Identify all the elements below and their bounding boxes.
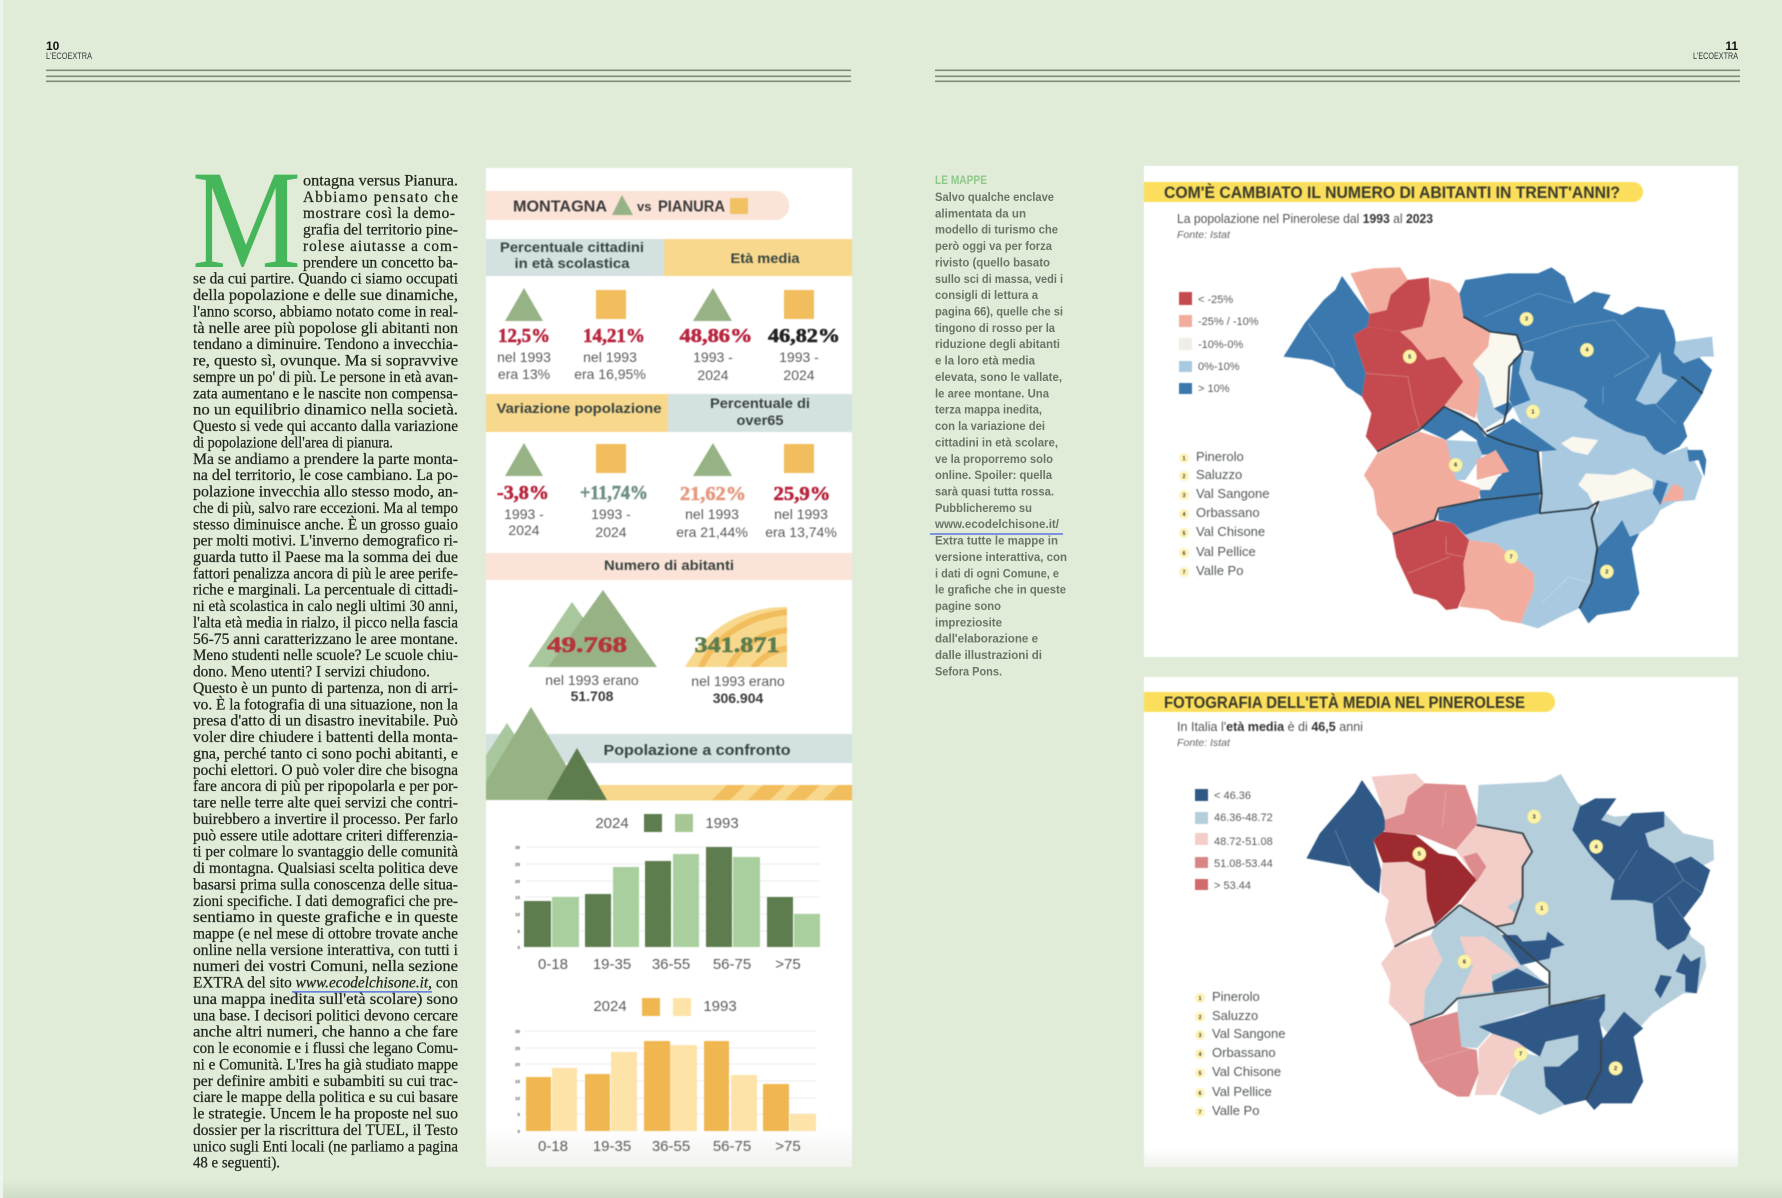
sidebar: le mappe: terza mappa inedita, xyxy=(935,403,1042,417)
legend: places: 3 xyxy=(1183,493,1186,499)
article body text: Meno studenti nelle scuole? Le scuole chiu- xyxy=(193,647,458,664)
page header right xyxy=(935,39,1740,82)
article body text: ti per colmare lo svantaggio delle comunità xyxy=(193,844,458,861)
article body text: presa d'atto di un disastro inevitabile. Può xyxy=(193,713,458,730)
mountain count: 51.708 xyxy=(571,688,614,704)
sidebar: le mappe xyxy=(930,173,1067,678)
mountain count: nel 1993 erano xyxy=(545,672,639,688)
article body text: le strategie. Uncem le ha proposte nel suo xyxy=(193,1106,458,1123)
legend: places: 5 xyxy=(1183,531,1186,537)
bar chart: montagna: 5 xyxy=(517,929,520,934)
sidebar: le mappe: versione interattiva, con xyxy=(935,550,1067,564)
stats row 2 xyxy=(497,443,837,540)
legend: population classes xyxy=(1179,292,1259,395)
bar chart: montagna: 0 xyxy=(517,945,520,950)
legend: pianura chart: 2024 xyxy=(593,998,627,1015)
article body text: di popolazione dell'area di pianura. xyxy=(193,434,393,451)
bar chart: pianura xyxy=(515,1029,816,1155)
page header left: 10 xyxy=(46,39,60,53)
article body text: numeri dei vostri Comuni, nella sezione xyxy=(193,958,458,975)
choropleth map: median age: 1 xyxy=(1540,906,1543,912)
legend: places: 6 xyxy=(1183,551,1186,557)
article body text: na del territorio, le cose cambiano. La po- xyxy=(193,467,458,484)
sidebar: le mappe: con la variazione dei xyxy=(935,419,1045,433)
bar chart: montagna: 10 xyxy=(515,912,520,917)
stats row 2: era 13,74% xyxy=(765,524,837,540)
sidebar: le mappe: Extra tutte le mappe in xyxy=(935,534,1058,548)
legend: places: 6 xyxy=(1199,1091,1202,1097)
article body text: Questo si vede qui accanto dalla variazione xyxy=(193,418,458,435)
mountains illustration xyxy=(485,706,608,801)
bar chart: montagna: 0-18 xyxy=(538,956,568,973)
legend: pianura chart xyxy=(593,998,737,1016)
section headers row 1: Età media xyxy=(730,250,800,266)
section headers row 2 xyxy=(486,394,852,432)
stats row 2: +11,74% xyxy=(580,482,648,504)
sidebar: le mappe: www.ecodelchisone.it/ xyxy=(934,517,1060,531)
article body text: zata aumentano e le nascite non compensa- xyxy=(193,385,458,402)
sidebar: le mappe: le aree montane. Una xyxy=(935,386,1049,400)
title pill: vs xyxy=(637,199,651,214)
choropleth map: median age xyxy=(1306,773,1714,1115)
article body text: Questo è un punto di partenza, non di arri- xyxy=(193,680,458,697)
sidebar: le mappe: riduzione degli abitanti xyxy=(935,337,1060,351)
legend: places: 4 xyxy=(1199,1052,1202,1058)
choropleth map: median age: 3 xyxy=(1533,815,1536,820)
page header left: L'ECOEXTRA xyxy=(46,51,93,62)
field count: 306.904 xyxy=(713,690,764,706)
stats row 2: 1993 - xyxy=(504,506,544,522)
stats row 2: 1993 - xyxy=(591,506,631,522)
article body text: EXTRA del sito www.ecodelchisone.it, con xyxy=(193,975,458,992)
sidebar: le mappe: pagine sono xyxy=(935,599,1001,613)
bar chart: montagna: 36-55 xyxy=(652,956,690,973)
sidebar: le mappe: dall'elaborazione e xyxy=(935,632,1038,646)
legend: age classes: 48.72-51.08 xyxy=(1214,836,1273,848)
band: numero di abitanti xyxy=(486,553,852,580)
legend: places: Val Pellice xyxy=(1212,1084,1272,1099)
sidebar: le mappe: e la loro età media xyxy=(935,354,1035,368)
article body text: voler dire chiudere i battenti della monta- xyxy=(193,729,458,746)
sidebar: le mappe: Sefora Pons. xyxy=(935,664,1002,678)
article body text: vo. È la fotografia di una situazione, non la xyxy=(193,696,458,713)
article body text: di montagna. Qualsiasi scelta politica deve xyxy=(193,860,458,877)
legend: population classes: -25% / -10% xyxy=(1198,316,1259,328)
choropleth map: population change: 2 xyxy=(1605,570,1608,575)
bar chart: montagna xyxy=(515,845,820,973)
sidebar: le mappe: LE MAPPE xyxy=(935,173,987,187)
stats row 2: 25,9% xyxy=(774,483,830,505)
article body text: sentiamo in queste grafiche e in queste xyxy=(193,909,458,926)
legend: places: Orbassano xyxy=(1212,1045,1276,1060)
legend: population classes: 0%-10% xyxy=(1198,361,1240,373)
article body text: Ma se andiamo a prendere la parte monta- xyxy=(193,451,458,468)
bar chart: pianura: 36-55 xyxy=(652,1138,690,1155)
panel: infographic montagna vs pianura xyxy=(457,168,852,1167)
choropleth map: median age: 6 xyxy=(1463,960,1466,965)
legend: age classes: 51.08-53.44 xyxy=(1214,858,1273,870)
stats row 2: nel 1993 xyxy=(685,506,739,522)
field count: 341.871 xyxy=(694,632,780,657)
article body text: polazione invecchia allo stesso modo, an- xyxy=(193,484,458,500)
article body text: dono. Meno utenti? I servizi chiudono. xyxy=(193,664,430,681)
sidebar: le mappe: Pubblicheremo su xyxy=(935,501,1032,515)
article body text: ciare le mappe della politica e su cui basare xyxy=(193,1089,458,1106)
page header right: 11 xyxy=(1725,39,1738,53)
sidebar: le mappe: Salvo qualche enclave xyxy=(935,190,1054,204)
choropleth map: median age: 7 xyxy=(1519,1052,1522,1058)
choropleth map: median age: 4 xyxy=(1595,845,1598,850)
article body text: guarda tutto il Paese ma la somma dei due xyxy=(193,549,458,566)
choropleth map: population change: 7 xyxy=(1510,555,1513,560)
sidebar: le mappe: sullo sci di massa, vedi i xyxy=(935,272,1063,286)
sidebar: le mappe: impreziosite xyxy=(935,615,1002,629)
choropleth map: population change: 5 xyxy=(1408,355,1411,360)
article body text xyxy=(192,142,458,1172)
article body text: mappe (e nel mese di ottobre trovate anche xyxy=(193,926,458,942)
stats row 1: 12,5% xyxy=(498,325,550,347)
bar chart: montagna: 30 xyxy=(515,845,520,850)
article body text: pochi elettori. O può voler dire che bisogna xyxy=(193,762,458,779)
bar chart: pianura: 0-18 xyxy=(538,1138,568,1155)
legend: places: Val Pellice xyxy=(1196,544,1256,559)
article body text: che di più, salvo rare eccezioni. Ma al tempo xyxy=(193,500,458,517)
sidebar: le mappe: pagina 66), quelle che si xyxy=(935,304,1063,318)
article body text: per definire ambiti e subambiti su cui trac- xyxy=(193,1073,458,1090)
stats row 1: 1993 - xyxy=(693,349,733,365)
sidebar: le mappe: ve la proporremo solo xyxy=(935,452,1053,466)
article body text: no un equilibrio dinamico nella società. xyxy=(193,402,458,419)
bar chart: montagna: 20 xyxy=(515,879,520,884)
article body text: fare ancora di più per ripopolarla e per por- xyxy=(193,778,458,795)
drop cap M: M xyxy=(192,142,301,298)
article body text: riche e marginali. La percentuale di cittadi- xyxy=(193,582,458,599)
band: numero di abitanti: Numero di abitanti xyxy=(604,557,734,573)
decorative field stripe xyxy=(590,785,852,800)
band: popolazione a confronto: Popolazione a confronto xyxy=(604,742,790,759)
legend: places: 2 xyxy=(1199,1015,1202,1021)
legend: places: 2 xyxy=(1183,474,1186,480)
sidebar: le mappe: modello di turismo che xyxy=(935,223,1058,237)
choropleth map: population change: 4 xyxy=(1585,348,1589,354)
bar chart: pianura: 5 xyxy=(517,1112,520,1117)
legend: places: Pinerolo xyxy=(1196,449,1244,464)
legend: population classes: < -25% xyxy=(1198,294,1233,306)
article body text: fattori penalizza ancora di più le aree perife- xyxy=(193,565,458,582)
page header right: L'ECOEXTRA xyxy=(1693,51,1739,62)
legend: places: 1 xyxy=(1199,996,1202,1002)
subtitle: age map: In Italia l'età media è di 46,5 anni xyxy=(1177,719,1363,734)
sidebar: le mappe: però oggi va per forza xyxy=(935,239,1052,253)
sidebar: le mappe: online. Spoiler: quella xyxy=(935,468,1052,482)
choropleth map: population change: 1 xyxy=(1531,410,1535,415)
article body text: una base. I decisori politici devono cercare xyxy=(193,1007,458,1024)
article body text: prendere un concetto ba- xyxy=(303,254,458,271)
legend: places: Val Sangone xyxy=(1196,486,1270,501)
legend: pianura chart: 1993 xyxy=(703,998,737,1015)
panel: map population change xyxy=(1144,166,1738,657)
legend: montagna chart: 1993 xyxy=(705,815,739,832)
subtitle: age map xyxy=(1177,719,1363,749)
article body text: se da cui partire. Quando ci siamo occupati xyxy=(193,271,458,288)
article body text: ontagna versus Pianura. xyxy=(303,172,458,190)
article body text: basarsi prima sulla conoscenza delle situa- xyxy=(193,876,458,893)
article body text: unico sugli Enti locali (ne parliamo a pagina xyxy=(193,1138,458,1155)
sidebar: le mappe: dalle illustrazioni di xyxy=(935,648,1042,662)
section headers row 1: in età scolastica xyxy=(514,255,630,271)
bar chart: pianura: 10 xyxy=(515,1096,520,1101)
sidebar: le mappe: sarà quasi tutta rossa. xyxy=(935,484,1054,498)
section headers row 1 xyxy=(486,239,852,276)
stats row 1: 1993 - xyxy=(779,349,819,365)
article body text: l'alta età media in rialzo, il picco nella fascia xyxy=(193,614,458,632)
stats row 1: 14,21% xyxy=(583,325,645,347)
article body text: ni e Comunità. L'Ires ha già studiato mappe xyxy=(193,1056,458,1074)
article body text: online nella versione interattiva, con tutti i xyxy=(193,942,458,959)
stats row 1: nel 1993 xyxy=(497,349,551,365)
legend: places: 3 xyxy=(1199,1033,1202,1039)
sidebar: le mappe: tingono di rosso per la xyxy=(935,321,1055,335)
sidebar: le mappe: elevata, sono le vallate, xyxy=(935,370,1062,384)
subtitle: age map: Fonte: Istat xyxy=(1177,738,1231,749)
section headers row 2: over65 xyxy=(736,412,784,428)
stats row 1: nel 1993 xyxy=(583,349,637,365)
stats row 1: era 16,95% xyxy=(574,366,646,382)
legend: places: 7 xyxy=(1199,1110,1202,1116)
article body text: buirebbero a invertire il processo. Per farlo xyxy=(193,811,458,828)
article body text: può essere utile adottare criteri differenzia- xyxy=(193,827,458,844)
article body text: grafia del territorio pine- xyxy=(303,222,458,239)
subtitle: population map: La popolazione nel Pinerolese dal 1993 al 2023 xyxy=(1177,211,1433,226)
article body text: rolese aiutasse a com- xyxy=(303,238,458,255)
stats row 1: 48,86% xyxy=(680,325,752,347)
bar chart: montagna: 25 xyxy=(515,862,520,867)
article body text: ni età scolastica in calo negli ultimi 30 anni, xyxy=(193,598,458,615)
stats row 2: 21,62% xyxy=(680,483,746,505)
choropleth map: median age: 2 xyxy=(1614,1066,1617,1072)
legend: places: Saluzzo xyxy=(1212,1008,1258,1023)
legend: places: Val Chisone xyxy=(1196,524,1265,539)
legend: places: 4 xyxy=(1183,512,1186,518)
legend: places: Orbassano xyxy=(1196,505,1260,520)
legend: age classes: > 53.44 xyxy=(1214,880,1251,892)
legend: population classes: > 10% xyxy=(1198,383,1230,395)
band: popolazione a confronto xyxy=(486,734,852,763)
legend: montagna chart: 2024 xyxy=(595,815,629,832)
page header left xyxy=(46,39,851,82)
article body text: con le economie e i flussi che legano Comu- xyxy=(193,1040,458,1057)
legend: places: Pinerolo xyxy=(1212,989,1260,1004)
choropleth map: median age: 5 xyxy=(1418,852,1421,858)
stats row 1: 2024 xyxy=(697,367,729,383)
bar chart: pianura: 19-35 xyxy=(593,1138,631,1155)
bar chart: pianura: 15 xyxy=(515,1079,520,1084)
sidebar: le mappe: rivisto (quello basato xyxy=(935,255,1050,269)
mountain count: 49.768 xyxy=(547,632,627,657)
bar chart: montagna: 19-35 xyxy=(593,956,631,973)
article body text: Abbiamo pensato che xyxy=(303,189,458,206)
article body text: zioni specifiche. I dati demografici che pre- xyxy=(193,893,458,910)
legend: places: 5 xyxy=(1199,1071,1202,1077)
legend: places: Saluzzo xyxy=(1196,467,1242,482)
article body text: tà nelle aree più popolose gli abitanti non xyxy=(193,320,458,337)
stats row 2: nel 1993 xyxy=(774,506,828,522)
sidebar: le mappe: cittadini in età scolare, xyxy=(935,435,1058,449)
stats row 1: era 13% xyxy=(498,366,550,382)
legend: places: 7 xyxy=(1183,570,1186,576)
article body text: dossier per la riscrittura del TUEL, il Testo xyxy=(193,1122,458,1139)
choropleth map: population change xyxy=(1283,267,1714,628)
bar chart: montagna: 15 xyxy=(515,895,520,900)
stats row 1 xyxy=(497,288,840,383)
legend: places: Val Chisone xyxy=(1212,1064,1281,1079)
stats row 1: 46,82% xyxy=(768,325,840,347)
article body text: mostrare così la demo- xyxy=(303,205,455,222)
bar chart: pianura: 20 xyxy=(515,1062,520,1067)
sidebar: le mappe: consigli di lettura a xyxy=(935,288,1038,302)
title pill: PIANURA xyxy=(658,198,725,216)
title pill xyxy=(486,191,789,220)
stats row 2: era 21,44% xyxy=(676,524,748,540)
subtitle: population map: Fonte: Istat xyxy=(1177,230,1231,241)
mountain count xyxy=(528,590,657,704)
bar chart: pianura: 0 xyxy=(517,1129,520,1134)
heading: age map: FOTOGRAFIA DELL'ETÀ MEDIA NEL PINEROLESE xyxy=(1164,693,1525,712)
article body text: anche altri numeri, che hanno a che fare xyxy=(193,1024,458,1041)
article body text: tare nelle terre alte quei servizi che contri- xyxy=(193,794,458,812)
field count xyxy=(685,607,790,706)
choropleth map: population change: 3 xyxy=(1525,317,1528,323)
panel: map median age xyxy=(1144,677,1738,1167)
legend: places: 1 xyxy=(1183,456,1186,462)
article body text: 48 e seguenti). xyxy=(193,1155,280,1172)
article body text: per molti motivi. L'inverno demografico ri- xyxy=(193,533,458,550)
legend: places: Valle Po xyxy=(1196,563,1243,578)
bar chart: pianura: 56-75 xyxy=(713,1138,751,1155)
legend: age classes: 46.36-48.72 xyxy=(1214,812,1273,824)
section headers row 1: Percentuale cittadini xyxy=(500,239,644,255)
section headers row 2: Percentuale di xyxy=(710,395,810,411)
subtitle: population map xyxy=(1177,211,1433,241)
bar chart: montagna: 56-75 xyxy=(713,956,751,973)
legend: places xyxy=(1195,989,1286,1118)
choropleth map: population change: 6 xyxy=(1454,463,1457,469)
legend: age classes xyxy=(1195,789,1273,892)
article body text: della popolazione e delle sue dinamiche, xyxy=(193,287,458,304)
article body text: una mappa inedita sull'età scolare) sono xyxy=(193,991,458,1008)
legend: montagna chart xyxy=(595,814,739,832)
bar chart: montagna: >75 xyxy=(775,956,801,973)
bar chart: pianura: >75 xyxy=(775,1138,801,1155)
sidebar: le mappe: le grafiche che in queste xyxy=(935,583,1066,597)
article body text: sempre un po' di più. Le persone in età avan- xyxy=(193,369,458,386)
legend: population classes: -10%-0% xyxy=(1198,339,1243,351)
stats row 2: -3,8% xyxy=(497,482,549,504)
section headers row 2: Variazione popolazione xyxy=(496,400,662,416)
bar chart: pianura: 30 xyxy=(515,1029,520,1034)
field count: nel 1993 erano xyxy=(691,673,785,689)
sidebar: le mappe: i dati di ogni Comune, e xyxy=(935,566,1059,580)
stats row 2: 2024 xyxy=(595,524,627,540)
sidebar: le mappe: alimentata da un xyxy=(935,206,1026,220)
bar chart: pianura: 25 xyxy=(515,1046,520,1051)
article body text: stesso diminuisce anche. È un grosso guaio xyxy=(193,516,458,533)
legend: places xyxy=(1179,449,1270,578)
article body text: tendano a diminuire. Tendono a invecchia- xyxy=(193,336,458,353)
heading: population map: COM'È CAMBIATO IL NUMERO DI ABITANTI IN TRENT'ANNI? xyxy=(1164,183,1620,202)
article body text: re, questo sì, ovunque. Ma si sopravvive xyxy=(193,353,458,370)
stats row 2: 2024 xyxy=(508,522,540,538)
legend: places: Val Sangone xyxy=(1212,1026,1286,1041)
article body text: 56-75 anni caratterizzano le aree montane. xyxy=(193,631,458,648)
legend: age classes: < 46.36 xyxy=(1214,790,1251,802)
article body text: l'anno scorso, abbiamo notato come in real- xyxy=(193,304,458,320)
article body text: gna, perché tanto ci sono pochi abitanti, e xyxy=(193,745,458,762)
legend: places: Valle Po xyxy=(1212,1103,1259,1118)
title pill: MONTAGNA xyxy=(513,198,607,216)
stats row 1: 2024 xyxy=(783,367,815,383)
